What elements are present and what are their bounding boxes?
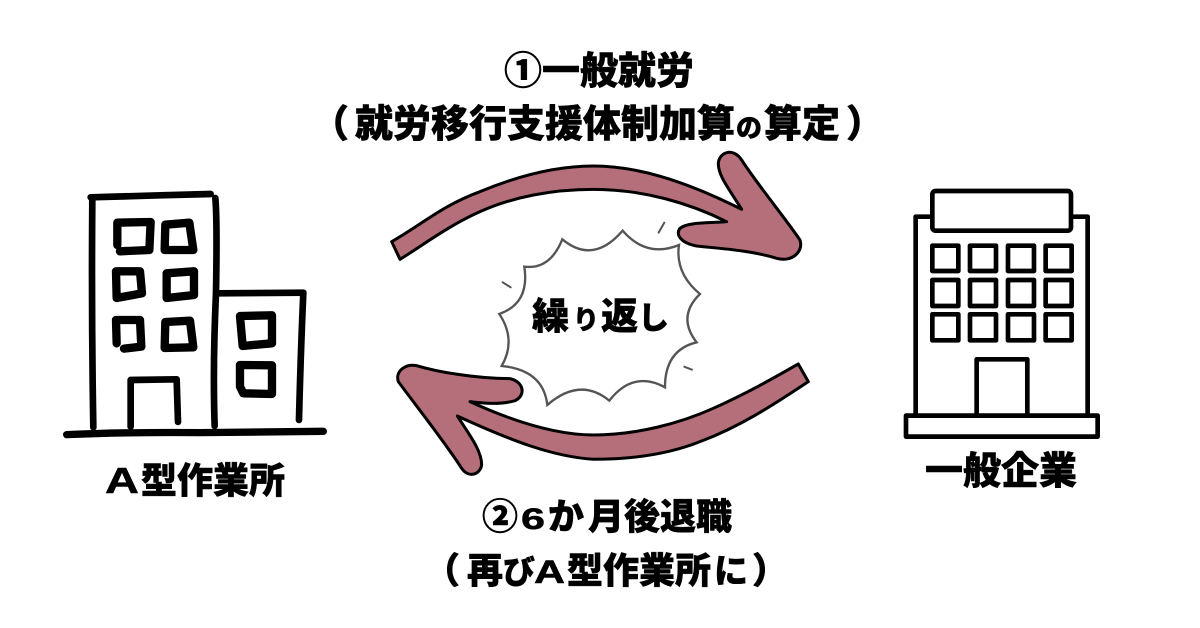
label: 一般企業: 一般企業 [925,451,1077,493]
heading: step 1: の [736,113,762,143]
heading: step 2: 再 [467,550,503,591]
heading: step 2 [424,496,788,591]
heading: step 1: ） [846,104,884,146]
heading: step 2: び [503,554,535,590]
label: 繰り返し: り [573,305,599,335]
heading: step 2: （ [424,550,460,591]
heading: step 1: 就労移行支援体制加算 [355,104,735,146]
burst accent marks [503,223,692,370]
heading: step 1: （ [311,104,349,146]
heading: step 2: 型作業所 [567,550,711,591]
heading: step 2: 月後退職 [588,496,732,537]
icon: general company building [906,191,1098,437]
heading: step 1: ①一般就労 [504,51,694,93]
heading: step 2: 6 [521,503,545,536]
arrow: top, to general employer [392,152,801,259]
heading: step 2: A [534,554,565,590]
heading: step 1 [311,51,884,146]
arrow: bottom, back to A型 workplace [398,364,808,474]
heading: step 2: か [548,496,584,537]
heading: step 1: 算定 [764,104,840,146]
label: 繰り返し: 繰 [532,296,569,337]
burst: speech bubble [499,231,700,405]
label: 繰り返し: 返 [601,296,638,337]
heading: step 2: ） [752,550,788,591]
heading: step 2: に [714,553,748,591]
label: A型作業所: A [105,460,139,501]
label: 繰り返し: し [638,301,669,336]
icon: A型 workplace building [67,194,323,435]
label: A型作業所: 型作業所 [141,460,285,501]
heading: step 2: ② [482,496,518,537]
